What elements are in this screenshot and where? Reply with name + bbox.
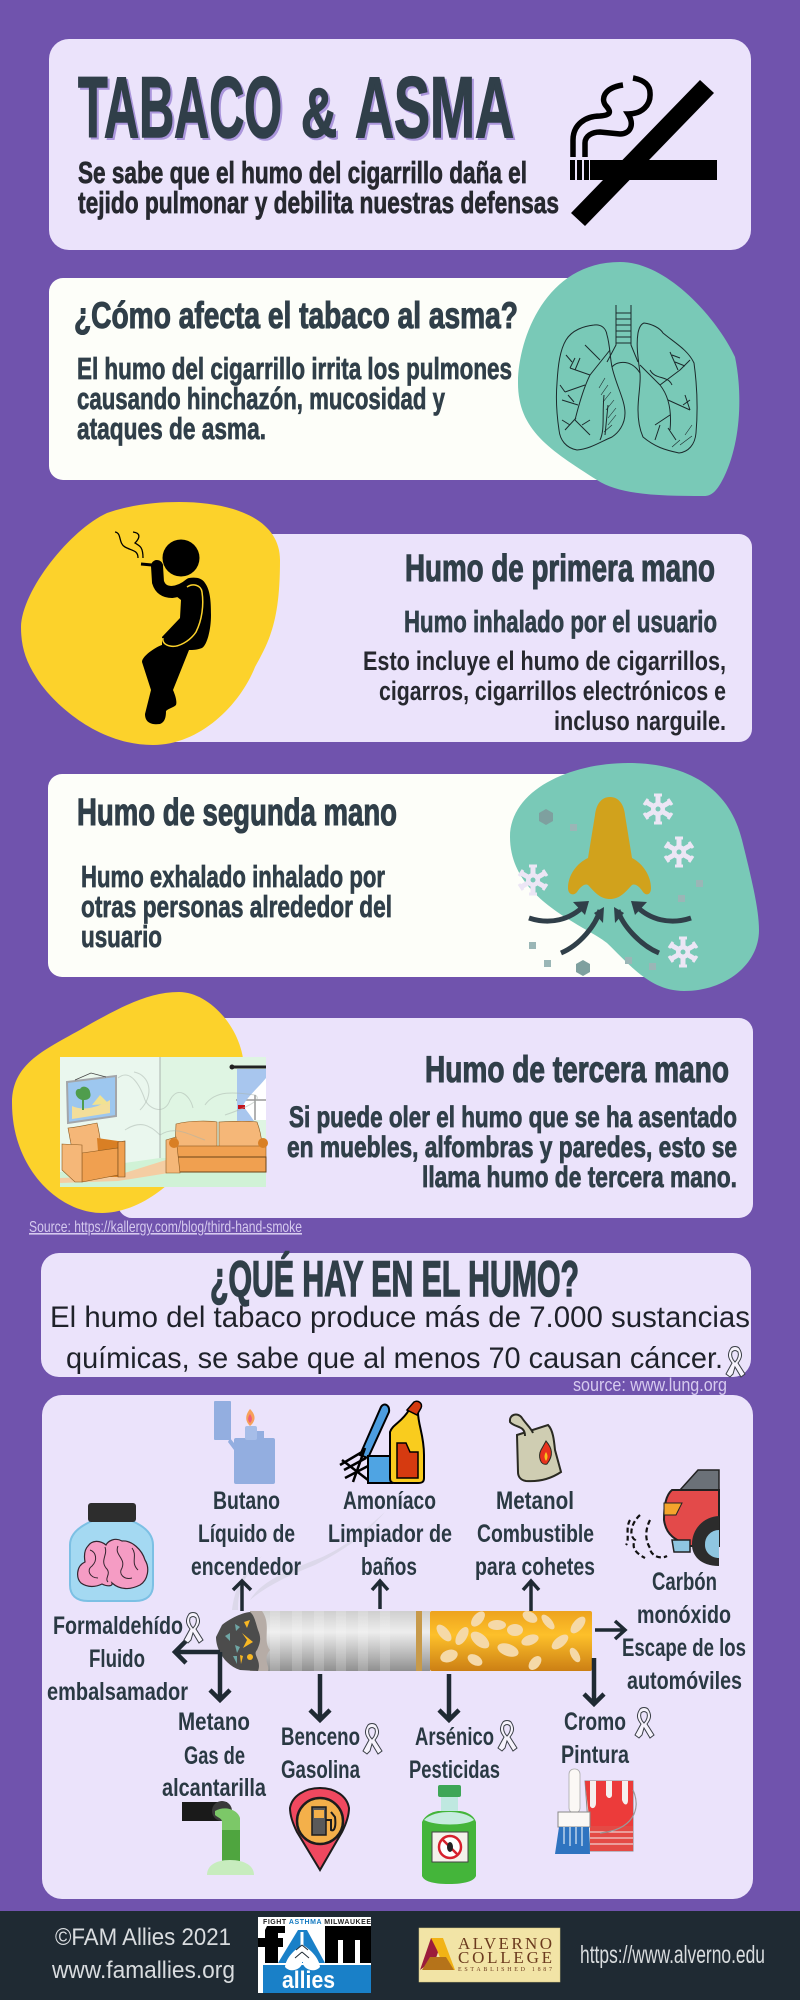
body text xyxy=(287,1101,737,1194)
panel: first hand smoke xyxy=(21,502,752,745)
label: carbon monoxide: monóxido xyxy=(637,1601,731,1629)
logo: FAM allies xyxy=(258,1917,371,1994)
label: amoniaco xyxy=(328,1487,452,1581)
body text: otras personas alrededor del xyxy=(81,889,392,924)
ribbons xyxy=(184,1612,654,1754)
body text xyxy=(50,1301,750,1375)
label: carbon monoxide: Carbón xyxy=(652,1568,717,1596)
title: & xyxy=(301,74,337,152)
icon: lighter xyxy=(214,1401,275,1484)
label: formaldehido xyxy=(47,1612,188,1706)
label: amoniaco: Amoníaco xyxy=(343,1487,436,1515)
label: cromo: Cromo xyxy=(564,1708,626,1736)
label: formaldehido: embalsamador xyxy=(47,1678,188,1706)
label: arsenico xyxy=(409,1723,500,1784)
label: metanol xyxy=(475,1487,595,1581)
label: butano: Líquido de xyxy=(198,1520,295,1548)
icon: fuel can xyxy=(510,1415,561,1481)
smoke wisp xyxy=(232,1512,385,1610)
icon: pesticide spray xyxy=(422,1785,476,1884)
label: butano: encendedor xyxy=(191,1553,301,1581)
icon: lungs xyxy=(556,305,697,453)
label: arsenico: Arsénico xyxy=(415,1723,494,1751)
logo: Alverno College xyxy=(419,1928,560,1982)
body text: ataques de asma. xyxy=(77,411,266,446)
heading: ¿Cómo afecta el tabaco al asma? xyxy=(74,295,518,336)
teal blob xyxy=(518,262,739,496)
label: metano: alcantarilla xyxy=(162,1774,267,1802)
body text xyxy=(363,646,726,736)
panel: third hand smoke xyxy=(12,992,753,1218)
body text: causando hinchazón, mucosidad y xyxy=(77,381,446,416)
footer credits xyxy=(51,1924,235,1984)
logo: Alverno College: ALVERNO xyxy=(458,1934,552,1953)
logo: FAM allies: allies xyxy=(282,1967,335,1994)
icon: smoking person xyxy=(115,532,211,724)
title: TABACO xyxy=(78,60,282,156)
label: metano xyxy=(162,1708,267,1802)
logo: Alverno College: COLLEGE xyxy=(458,1948,552,1967)
icon: cleaning products xyxy=(340,1401,424,1483)
label: metano: Metano xyxy=(178,1708,250,1736)
footer credits: ©FAM Allies 2021 xyxy=(55,1924,231,1951)
panel: chemicals diagram xyxy=(42,1395,753,1899)
label: formaldehido: Fluido xyxy=(89,1645,145,1673)
label: metanol: para cohetes xyxy=(475,1553,595,1581)
panel: second hand smoke xyxy=(48,763,759,991)
icon: paint bucket and brush xyxy=(555,1769,636,1854)
body text: químicas, se sabe que al menos 70 causan cáncer. xyxy=(66,1342,723,1375)
body text: Humo exhalado inhalado por xyxy=(81,859,385,894)
title: ASMA xyxy=(355,60,514,156)
label: metano: Gas de xyxy=(184,1742,245,1770)
panel: what's in the smoke xyxy=(41,1251,751,1377)
label: cromo xyxy=(561,1708,630,1769)
footer credits: www.famallies.org xyxy=(51,1957,235,1984)
cigarette xyxy=(216,1609,592,1672)
body text xyxy=(81,859,392,954)
icon: brain in jar xyxy=(70,1503,153,1601)
logo: FAM allies: FIGHT ASTHMA MILWAUKEE xyxy=(263,1919,371,1926)
label: carbon monoxide: Escape de los xyxy=(622,1634,746,1662)
label: benceno: Benceno xyxy=(281,1723,360,1751)
label: butano xyxy=(191,1487,301,1581)
label: benceno xyxy=(281,1723,361,1784)
label: formaldehido: Formaldehído xyxy=(53,1612,183,1640)
title: & xyxy=(303,76,339,154)
title: ASMA xyxy=(357,62,516,158)
label: butano: Butano xyxy=(213,1487,280,1515)
logo: Alverno College: ESTABLISHED 1887 xyxy=(458,1967,552,1973)
source link: Source: https://kallergy.com/blog/third-hand-smoke xyxy=(29,1219,302,1236)
heading: Humo de segunda mano xyxy=(77,792,397,834)
icon: sewage pipe xyxy=(182,1801,254,1875)
label: carbon monoxide xyxy=(622,1568,746,1695)
teal blob xyxy=(510,763,759,991)
body text: El humo del tabaco produce más de 7.000 sustancias xyxy=(50,1301,750,1334)
icon: ribbon xyxy=(726,1346,745,1377)
yellow blob xyxy=(21,502,280,745)
panel: how tobacco affects asthma xyxy=(49,262,739,496)
label: arsenico: Pesticidas xyxy=(409,1756,500,1784)
intro text: Se sabe que el humo del cigarrillo daña el xyxy=(78,155,527,190)
label: metanol: Combustible xyxy=(477,1520,594,1548)
icon: no smoking xyxy=(570,78,717,226)
intro text: tejido pulmonar y debilita nuestras defensas xyxy=(78,185,559,220)
label: carbon monoxide: automóviles xyxy=(627,1667,742,1695)
label: cromo: Pintura xyxy=(561,1741,630,1769)
body text: usuario xyxy=(81,919,162,954)
intro text xyxy=(78,155,559,220)
body text: El humo del cigarrillo irrita los pulmones xyxy=(77,351,512,386)
panel: title xyxy=(49,39,751,250)
label: amoniaco: Limpiador de xyxy=(328,1520,452,1548)
illustration: living room xyxy=(60,1057,268,1187)
body text xyxy=(77,351,512,446)
source note: source: www.lung.org xyxy=(573,1375,727,1395)
icon: nose with particles xyxy=(519,795,703,976)
yellow blob xyxy=(12,992,244,1213)
footer xyxy=(0,1911,800,2000)
label: metanol: Metanol xyxy=(496,1487,574,1515)
label: amoniaco: baños xyxy=(361,1553,417,1581)
icon: car exhaust xyxy=(626,1470,719,1566)
body text: incluso narguile. xyxy=(554,706,726,736)
label: benceno: Gasolina xyxy=(281,1756,361,1784)
icon: fuel pin xyxy=(290,1788,349,1870)
title: TABACO xyxy=(80,62,284,158)
arrows xyxy=(175,1581,625,1720)
